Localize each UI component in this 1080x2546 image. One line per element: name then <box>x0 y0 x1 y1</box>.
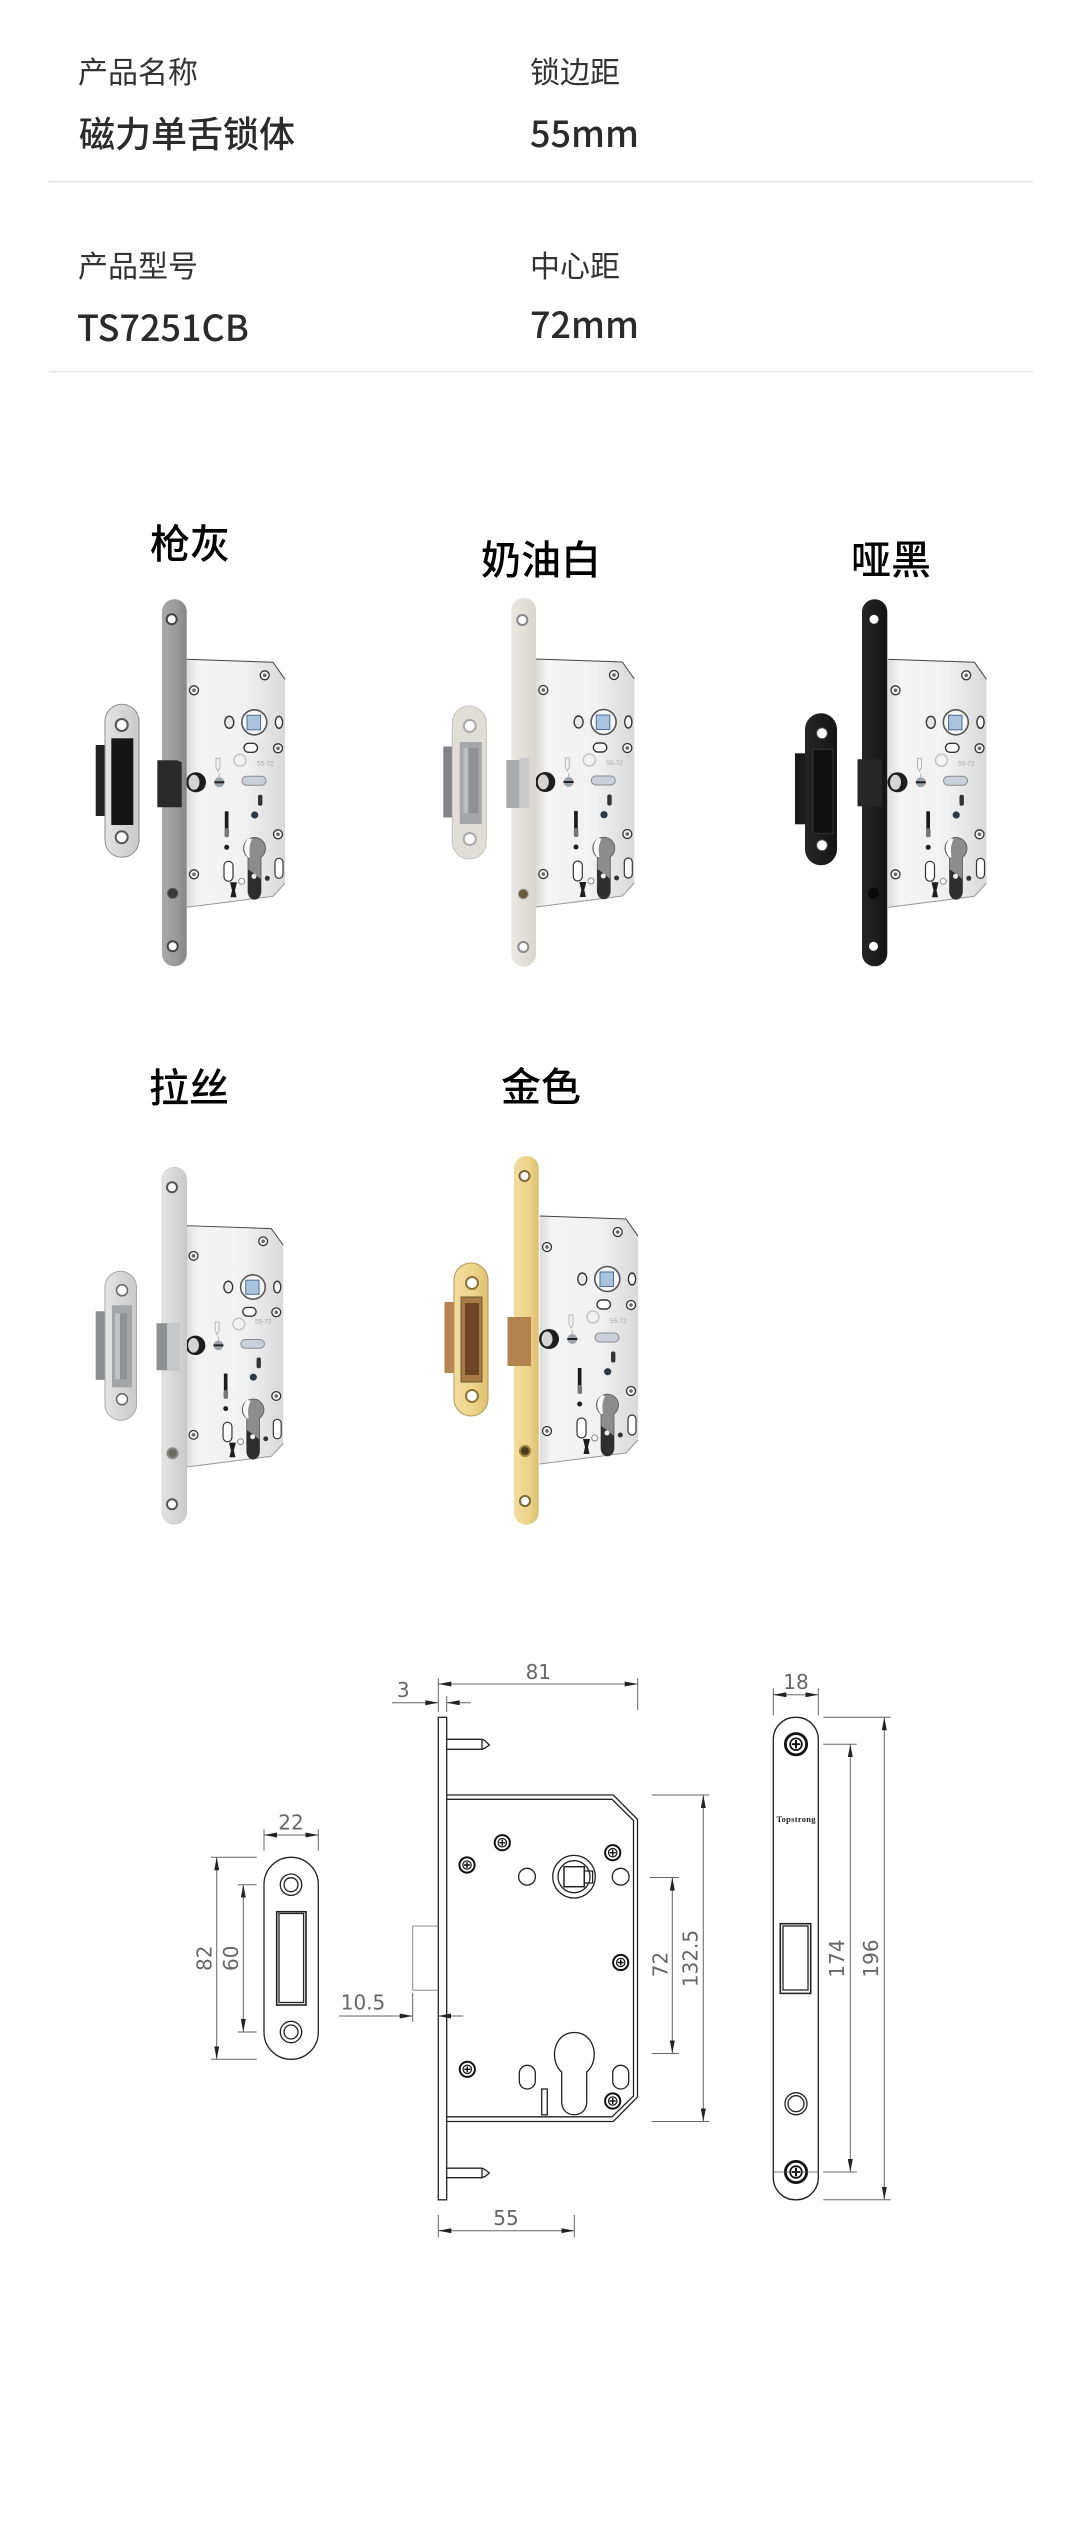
drawing: lock case side view <box>339 1660 709 2237</box>
lock: cream white: 55-72 <box>606 760 623 767</box>
lock: gun grey <box>96 599 285 966</box>
heading: cream white: 奶油白 <box>481 528 601 586</box>
logo mark: Topstrong <box>776 1814 816 1824</box>
dimension: 81: 81 <box>526 1660 551 1684</box>
dimension: 3: 3 <box>397 1678 410 1702</box>
lock: matte black <box>795 599 986 966</box>
heading: matte black: 哑黑 <box>851 528 931 586</box>
label: product model: 产品型号 <box>78 242 198 286</box>
dimension: 60: 60 <box>219 1946 243 1971</box>
dimension: 55: 55 <box>493 2206 519 2230</box>
lock: gun grey: 55-72 <box>257 760 274 767</box>
dimension: 132.5: 132.5 <box>678 1930 702 1987</box>
lock: brushed <box>96 1167 283 1524</box>
label: product name: 产品名称 <box>78 48 198 92</box>
dimension: 82: 82 <box>192 1946 216 1971</box>
value: centre distance: 72mm <box>530 297 639 349</box>
lock: brushed: 55-72 <box>255 1318 272 1325</box>
dimension: 72: 72 <box>648 1952 672 1977</box>
lock: cream white <box>443 598 634 967</box>
heading: gun grey: 枪灰 <box>150 512 230 570</box>
dimension: 10.5: 10.5 <box>341 1990 385 2014</box>
dimension: 174: 174 <box>825 1939 849 1978</box>
lock: gold: 55-72 <box>610 1318 627 1325</box>
value: backset: 55mm <box>530 106 639 158</box>
dimension: 22: 22 <box>278 1811 304 1835</box>
drawing: strike plate <box>192 1811 318 2059</box>
value: product name: 磁力单舌锁体 <box>79 106 295 158</box>
lock: gold <box>444 1156 638 1525</box>
label: centre distance: 中心距 <box>530 242 620 286</box>
dimension: 196: 196 <box>859 1939 883 1978</box>
heading: gold: 金色 <box>501 1055 581 1113</box>
lock: matte black: 55-72 <box>958 760 975 767</box>
value: product model: TS7251CB <box>77 300 249 352</box>
heading: brushed: 拉丝 <box>149 1056 229 1114</box>
drawing: face plate front view <box>773 1670 891 2200</box>
spec panel <box>49 48 1033 372</box>
label: backset: 锁边距 <box>530 48 620 92</box>
dimension: 18: 18 <box>783 1670 809 1694</box>
